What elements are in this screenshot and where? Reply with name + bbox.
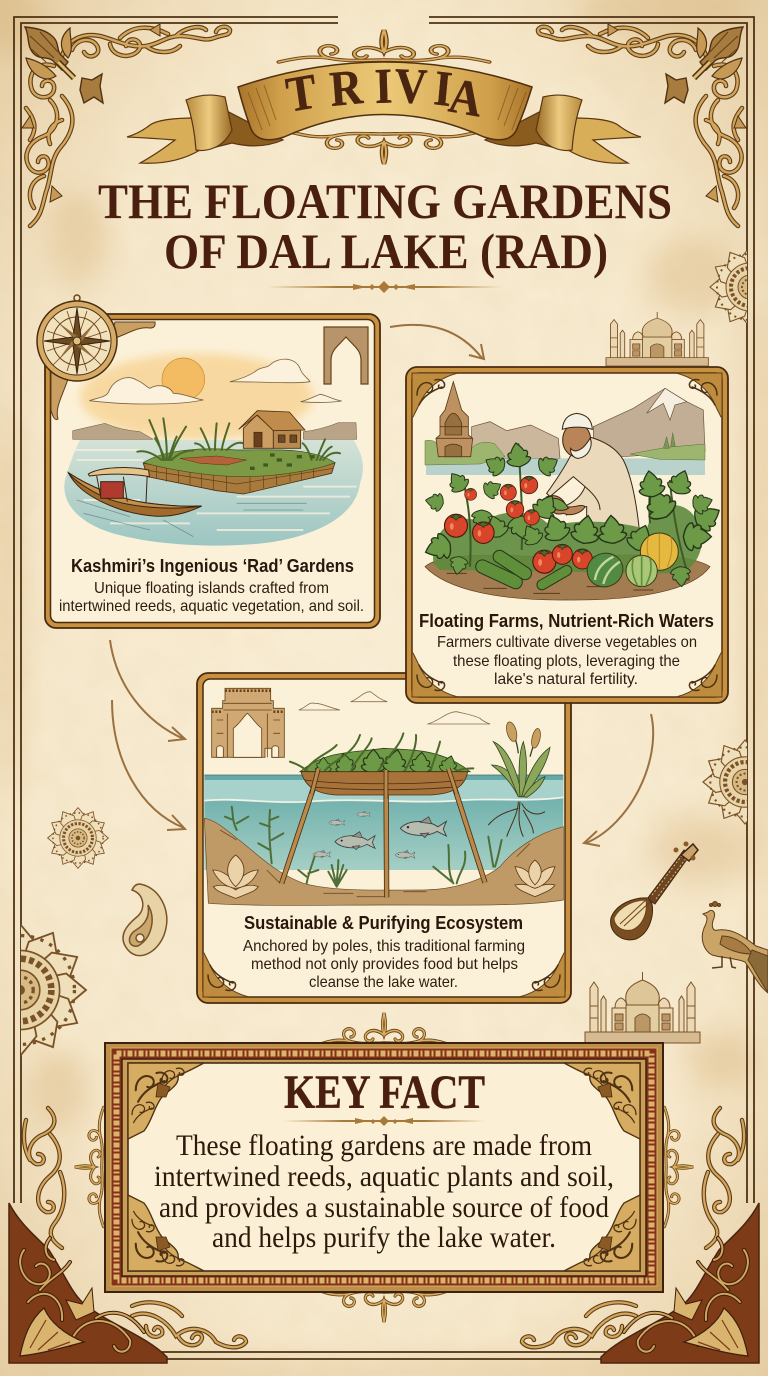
- farmer: [546, 413, 640, 537]
- fish: [313, 811, 446, 859]
- foliage mass: [433, 505, 702, 573]
- corner ornament: top left: [128, 1063, 204, 1139]
- taj mahal: bottom right: [585, 972, 700, 1043]
- heading: Floating Farms, Nutrient-Rich Waters: [419, 611, 714, 631]
- temple: [436, 382, 473, 457]
- description: Unique floating islands crafted from: [94, 580, 329, 597]
- corner ornament: right: [519, 953, 565, 997]
- cucumbers: [474, 548, 574, 592]
- corner ornament: left: [203, 953, 249, 997]
- key fact text: intertwined reeds, aquatic plants and soil,: [154, 1160, 614, 1193]
- clouds: [299, 692, 490, 724]
- soil: [425, 555, 710, 600]
- corner ornament: bottom right: [676, 653, 722, 697]
- icon: compass: [37, 295, 117, 381]
- stems: [463, 443, 687, 570]
- description: lake's natural fertility.: [494, 671, 638, 688]
- title divider: [267, 281, 502, 293]
- panel: sustainable ecosystem: [197, 673, 571, 1003]
- water plants: [225, 807, 502, 887]
- corner ornament: top right: [564, 1063, 640, 1139]
- title: [98, 173, 672, 279]
- corner ornament: [51, 322, 155, 420]
- floating basket: [290, 733, 473, 798]
- corner ornament: top left: [412, 373, 458, 417]
- illustration: lake island: [64, 353, 363, 546]
- heading: Kashmiri’s Ingenious ‘Rad’ Gardens: [71, 556, 354, 576]
- description: Farmers cultivate diverse vegetables on: [437, 634, 697, 651]
- arrow: card 1 to card 3 lower: [112, 700, 185, 830]
- flourish below key fact: [318, 1290, 450, 1322]
- key fact text: and helps purify the lake water.: [212, 1221, 556, 1254]
- banks: [425, 433, 705, 465]
- mandala: top right: [709, 250, 747, 324]
- heading: Sustainable & Purifying Ecosystem: [244, 913, 523, 933]
- flourish above banner: [279, 30, 489, 62]
- panel: ingenious rad gardens: [45, 314, 380, 628]
- icon: peacock: [702, 902, 768, 993]
- corner ornament: bottom left: [9, 1108, 246, 1363]
- card frame: [406, 367, 728, 703]
- mandala: left: [48, 808, 108, 868]
- panel: key fact: [105, 1043, 663, 1292]
- card frame: [197, 673, 571, 1003]
- description: [59, 580, 364, 615]
- clouds: [89, 359, 342, 404]
- icon: arch: [324, 327, 368, 384]
- ribbon: main band: [238, 62, 532, 140]
- flourish right of key fact: [664, 1107, 693, 1227]
- corner ornament: top left: [22, 24, 230, 226]
- banner title: TRIVIA: [283, 59, 485, 128]
- corner ornament: bottom right: [522, 1108, 759, 1363]
- corner ornament: bottom left: [412, 653, 458, 697]
- key fact text: [154, 1129, 614, 1254]
- leaves: [421, 441, 726, 587]
- corner ornament: top right: [538, 24, 746, 226]
- flourish above key fact: [318, 1013, 450, 1045]
- melons: [582, 533, 678, 592]
- mountains: [472, 388, 705, 458]
- description: Anchored by poles, this traditional farming: [243, 938, 525, 955]
- floating island: [137, 418, 340, 494]
- description: [437, 634, 697, 688]
- sun: [162, 358, 205, 401]
- corner ornament: bottom left: [128, 1195, 204, 1271]
- flourish below banner: [290, 132, 478, 164]
- illustration: farmer and vegetables: [421, 382, 726, 600]
- illustration: cross section: [204, 688, 563, 905]
- ornate frame: [105, 1043, 663, 1292]
- description: intertwined reeds, aquatic vegetation, and soil.: [59, 598, 364, 615]
- ribbon: right tail: [485, 95, 641, 163]
- description: [243, 938, 525, 991]
- arrow: card 1 to card 3 upper: [110, 640, 185, 741]
- banner: trivia: [127, 59, 641, 163]
- corner ornament: top right: [676, 373, 722, 417]
- gate: [212, 688, 284, 757]
- ribbon: left tail: [127, 95, 283, 163]
- lake bed: [204, 818, 563, 905]
- icon: paisley: [123, 884, 167, 956]
- boat: [68, 468, 202, 516]
- arrow: card 2 to card 3: [584, 714, 653, 846]
- title: THE FLOATING GARDENS: [98, 173, 672, 229]
- description: these floating plots, leveraging the: [453, 653, 680, 670]
- arrow: card 1 to card 2: [390, 325, 484, 359]
- tomatoes: [444, 476, 592, 573]
- corner ornament: bottom right: [564, 1195, 640, 1271]
- description: method not only provides food but helps: [251, 956, 518, 973]
- title: OF DAL LAKE (RAD): [164, 223, 608, 279]
- icon: sitar: [611, 842, 698, 940]
- water: [204, 775, 563, 870]
- taj mahal: top right: [606, 312, 708, 366]
- mountains: [73, 423, 357, 439]
- water: [64, 440, 363, 546]
- panel: floating farms: [406, 367, 728, 703]
- poles: [282, 768, 485, 897]
- heading: KEY FACT: [284, 1066, 485, 1119]
- key fact text: These floating gardens are made from: [176, 1129, 592, 1162]
- description: cleanse the lake water.: [309, 974, 458, 991]
- key fact text: and provides a sustainable source of food: [159, 1191, 609, 1224]
- reed plant: [488, 721, 550, 837]
- flourish left of key fact: [75, 1107, 104, 1227]
- divider: [283, 1116, 485, 1126]
- lotus flowers: [213, 855, 555, 898]
- mandala: right middle: [702, 739, 747, 825]
- card frame: [45, 314, 380, 628]
- house: [239, 411, 305, 448]
- water: [426, 458, 705, 475]
- mandala: bottom left: [21, 924, 88, 1056]
